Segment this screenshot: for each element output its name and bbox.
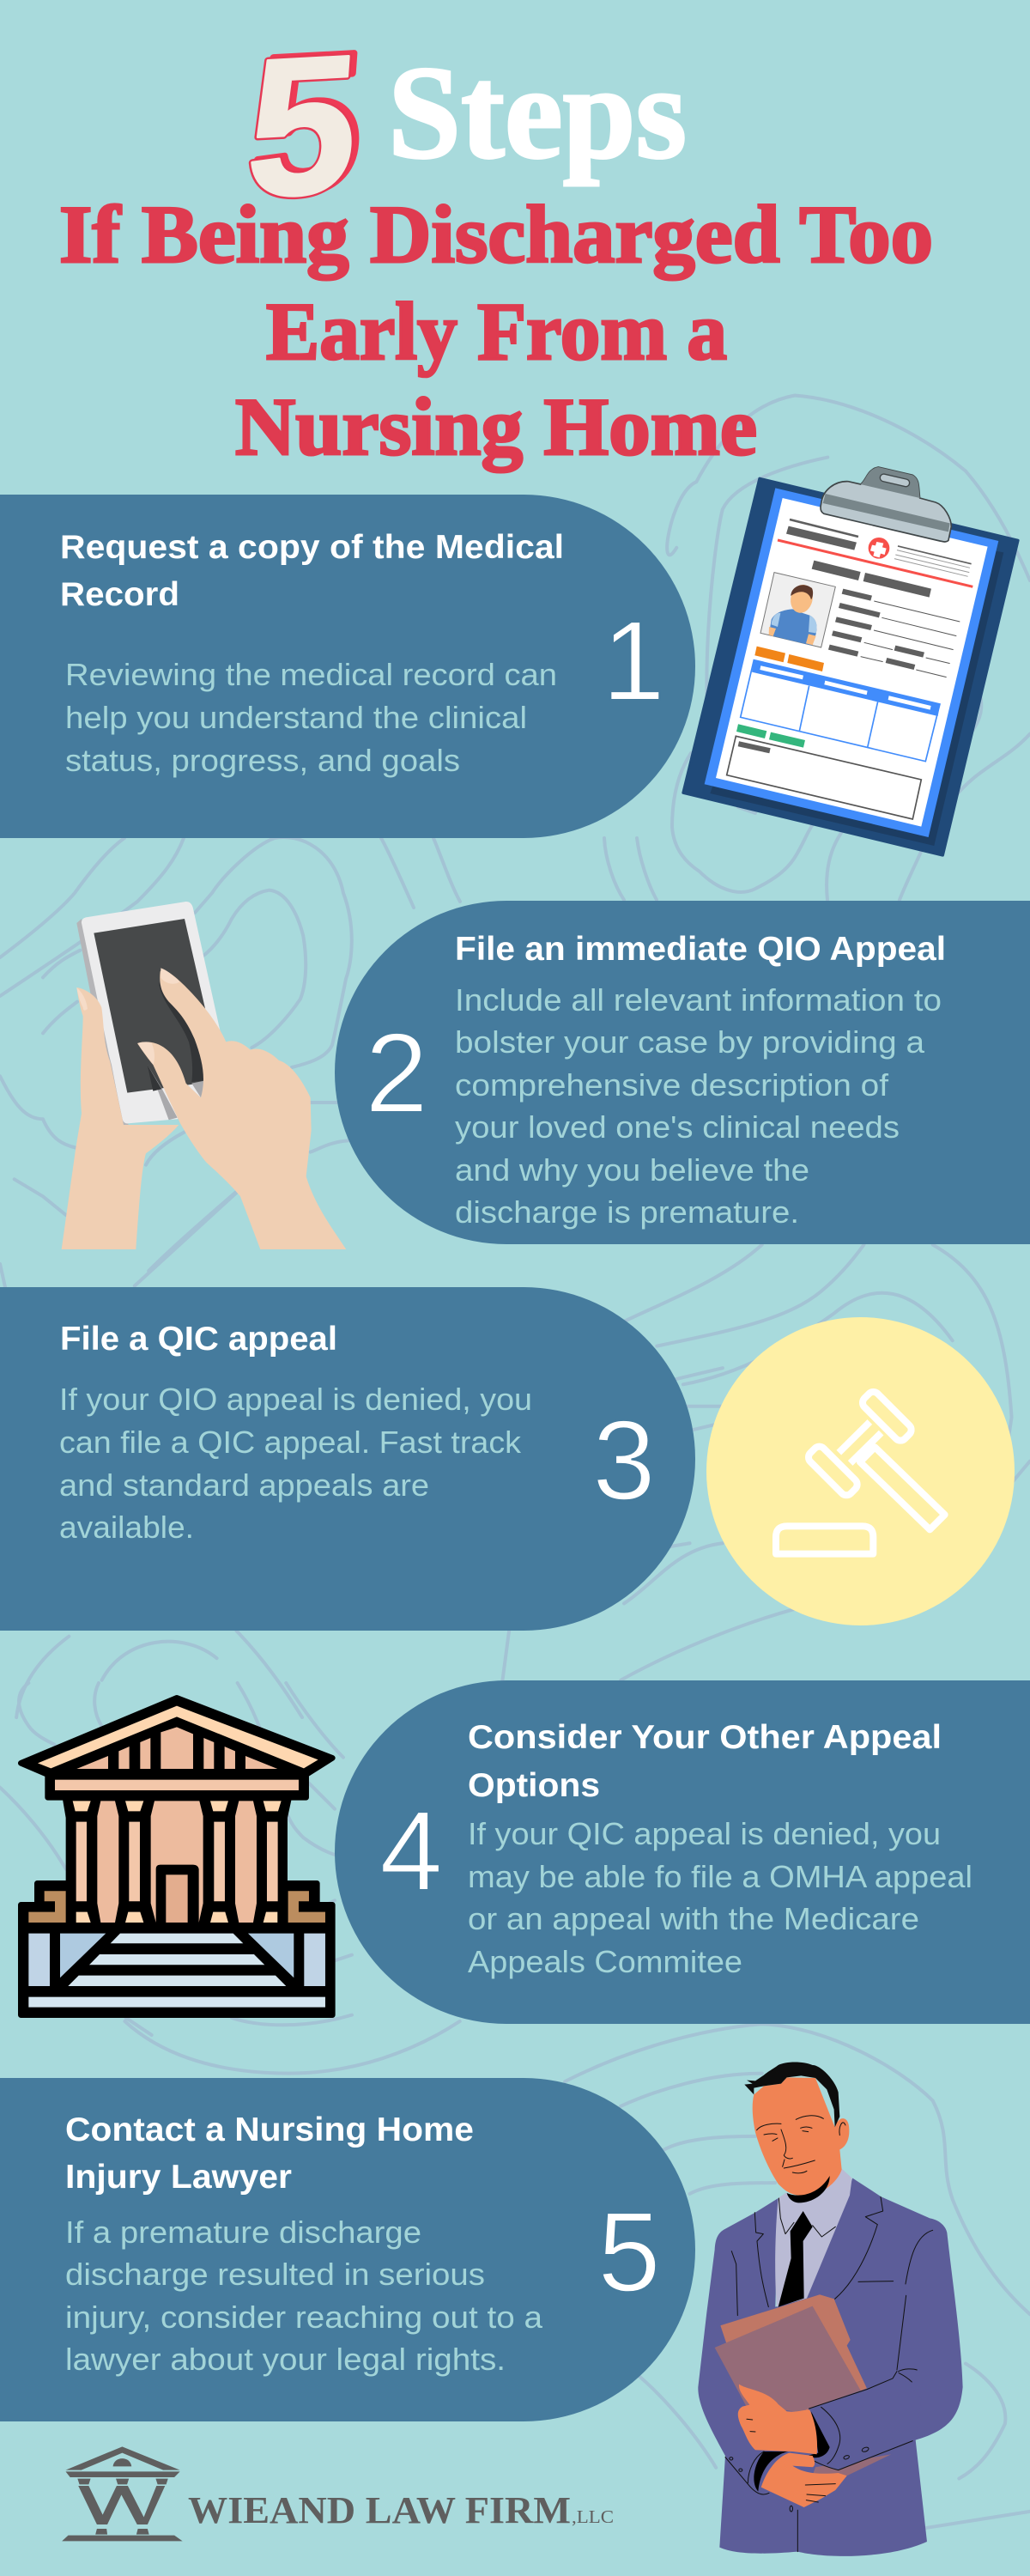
heading line 3: Nursing Home: [235, 381, 757, 472]
step 4 heading: Consider Your Other Appeal: [468, 1719, 942, 1756]
step 3 body: If your QIO appeal is denied, you: [59, 1382, 532, 1417]
step 1 number: 1: [602, 598, 665, 724]
step 1 heading: Record: [60, 576, 179, 613]
step 2 body: Include all relevant information to: [455, 982, 942, 1018]
step 4 number: 4: [379, 1788, 443, 1914]
title: [59, 11, 933, 472]
step 4 body: Appeals Commitee: [468, 1944, 742, 1979]
heading line 2: Early From a: [266, 286, 727, 377]
step 5 body: injury, consider reaching out to a: [65, 2300, 543, 2335]
step 3 number: 3: [592, 1397, 656, 1523]
icon: lawyer with folder: [698, 2063, 963, 2556]
hair: [744, 2063, 839, 2127]
step 2 body: comprehensive description of: [455, 1067, 889, 1103]
logo: Wieand Law Firm: [62, 2446, 614, 2541]
shirt: [775, 2168, 852, 2307]
step 1 body: status, progress, and goals: [65, 743, 460, 778]
word: Steps: Steps: [388, 39, 687, 186]
step 4 body: If your QIC appeal is denied, you: [468, 1816, 941, 1851]
icon: medical record clipboard: [683, 467, 1018, 855]
right hand: [137, 969, 346, 1249]
panel: step 4: [335, 1680, 1030, 2024]
logo wordmark: WIEAND LAW FIRM: [188, 2489, 571, 2531]
panel: step 5: [0, 2078, 695, 2421]
step 2 body: your loved one's clinical needs: [455, 1109, 900, 1145]
left hand: [62, 987, 179, 1249]
step 5 body: lawyer about your legal rights.: [65, 2342, 506, 2377]
logo mark: [62, 2446, 183, 2541]
necktie: [779, 2211, 813, 2307]
numeral 5: 5: [241, 14, 365, 239]
step 5 body: discharge resulted in serious: [65, 2257, 485, 2292]
suit lines: [731, 2196, 933, 2382]
folder: [715, 2294, 891, 2476]
step 1 body: Reviewing the medical record can: [65, 657, 557, 692]
panel: step 3: [0, 1287, 695, 1631]
face: [753, 2077, 849, 2196]
step 2 body: and why you believe the: [455, 1152, 809, 1188]
icon: courthouse: [21, 1698, 332, 2015]
step 3 body: can file a QIC appeal. Fast track: [59, 1425, 522, 1460]
hands: [725, 2385, 847, 2552]
icon: gavel in yellow circle: [706, 1317, 1015, 1625]
patient photo: [760, 573, 835, 647]
sleeve: [807, 2372, 921, 2470]
step 4 heading: Options: [468, 1767, 600, 1804]
step 5 heading: Contact a Nursing Home: [65, 2111, 474, 2148]
suit: [698, 2178, 963, 2556]
form table: [741, 660, 940, 762]
step 2 body: bolster your case by providing a: [455, 1024, 925, 1060]
step 2 heading: File an immediate QIO Appeal: [455, 931, 946, 968]
step 2 body: discharge is premature.: [455, 1194, 799, 1230]
step 2 number: 2: [365, 1010, 428, 1136]
panel: step 1: [0, 495, 695, 838]
numeral 5: 5: [241, 14, 365, 239]
step 5 number: 5: [597, 2189, 661, 2315]
step 4 body: may be able fo file a OMHA appeal: [468, 1859, 972, 1894]
step 1 heading: Request a copy of the Medical: [60, 529, 564, 566]
logo suffix: ,LLC: [572, 2506, 614, 2527]
step 4 body: or an appeal with the Medicare: [468, 1901, 919, 1936]
icon: hands holding smartphone: [62, 902, 346, 1249]
step 5 body: If a premature discharge: [65, 2215, 421, 2250]
panel: step 2: [335, 901, 1030, 1244]
facial features: [757, 2116, 823, 2130]
step 3 heading: File a QIC appeal: [60, 1321, 337, 1358]
step 3 body: and standard appeals are: [59, 1467, 429, 1503]
clip: [821, 467, 951, 542]
step 1 body: help you understand the clinical: [65, 700, 527, 735]
heading line 1: If Being Discharged Too: [59, 189, 933, 280]
numeral 5: 5: [246, 11, 370, 236]
step 3 body: available.: [59, 1510, 194, 1545]
step 5 heading: Injury Lawyer: [65, 2159, 292, 2196]
